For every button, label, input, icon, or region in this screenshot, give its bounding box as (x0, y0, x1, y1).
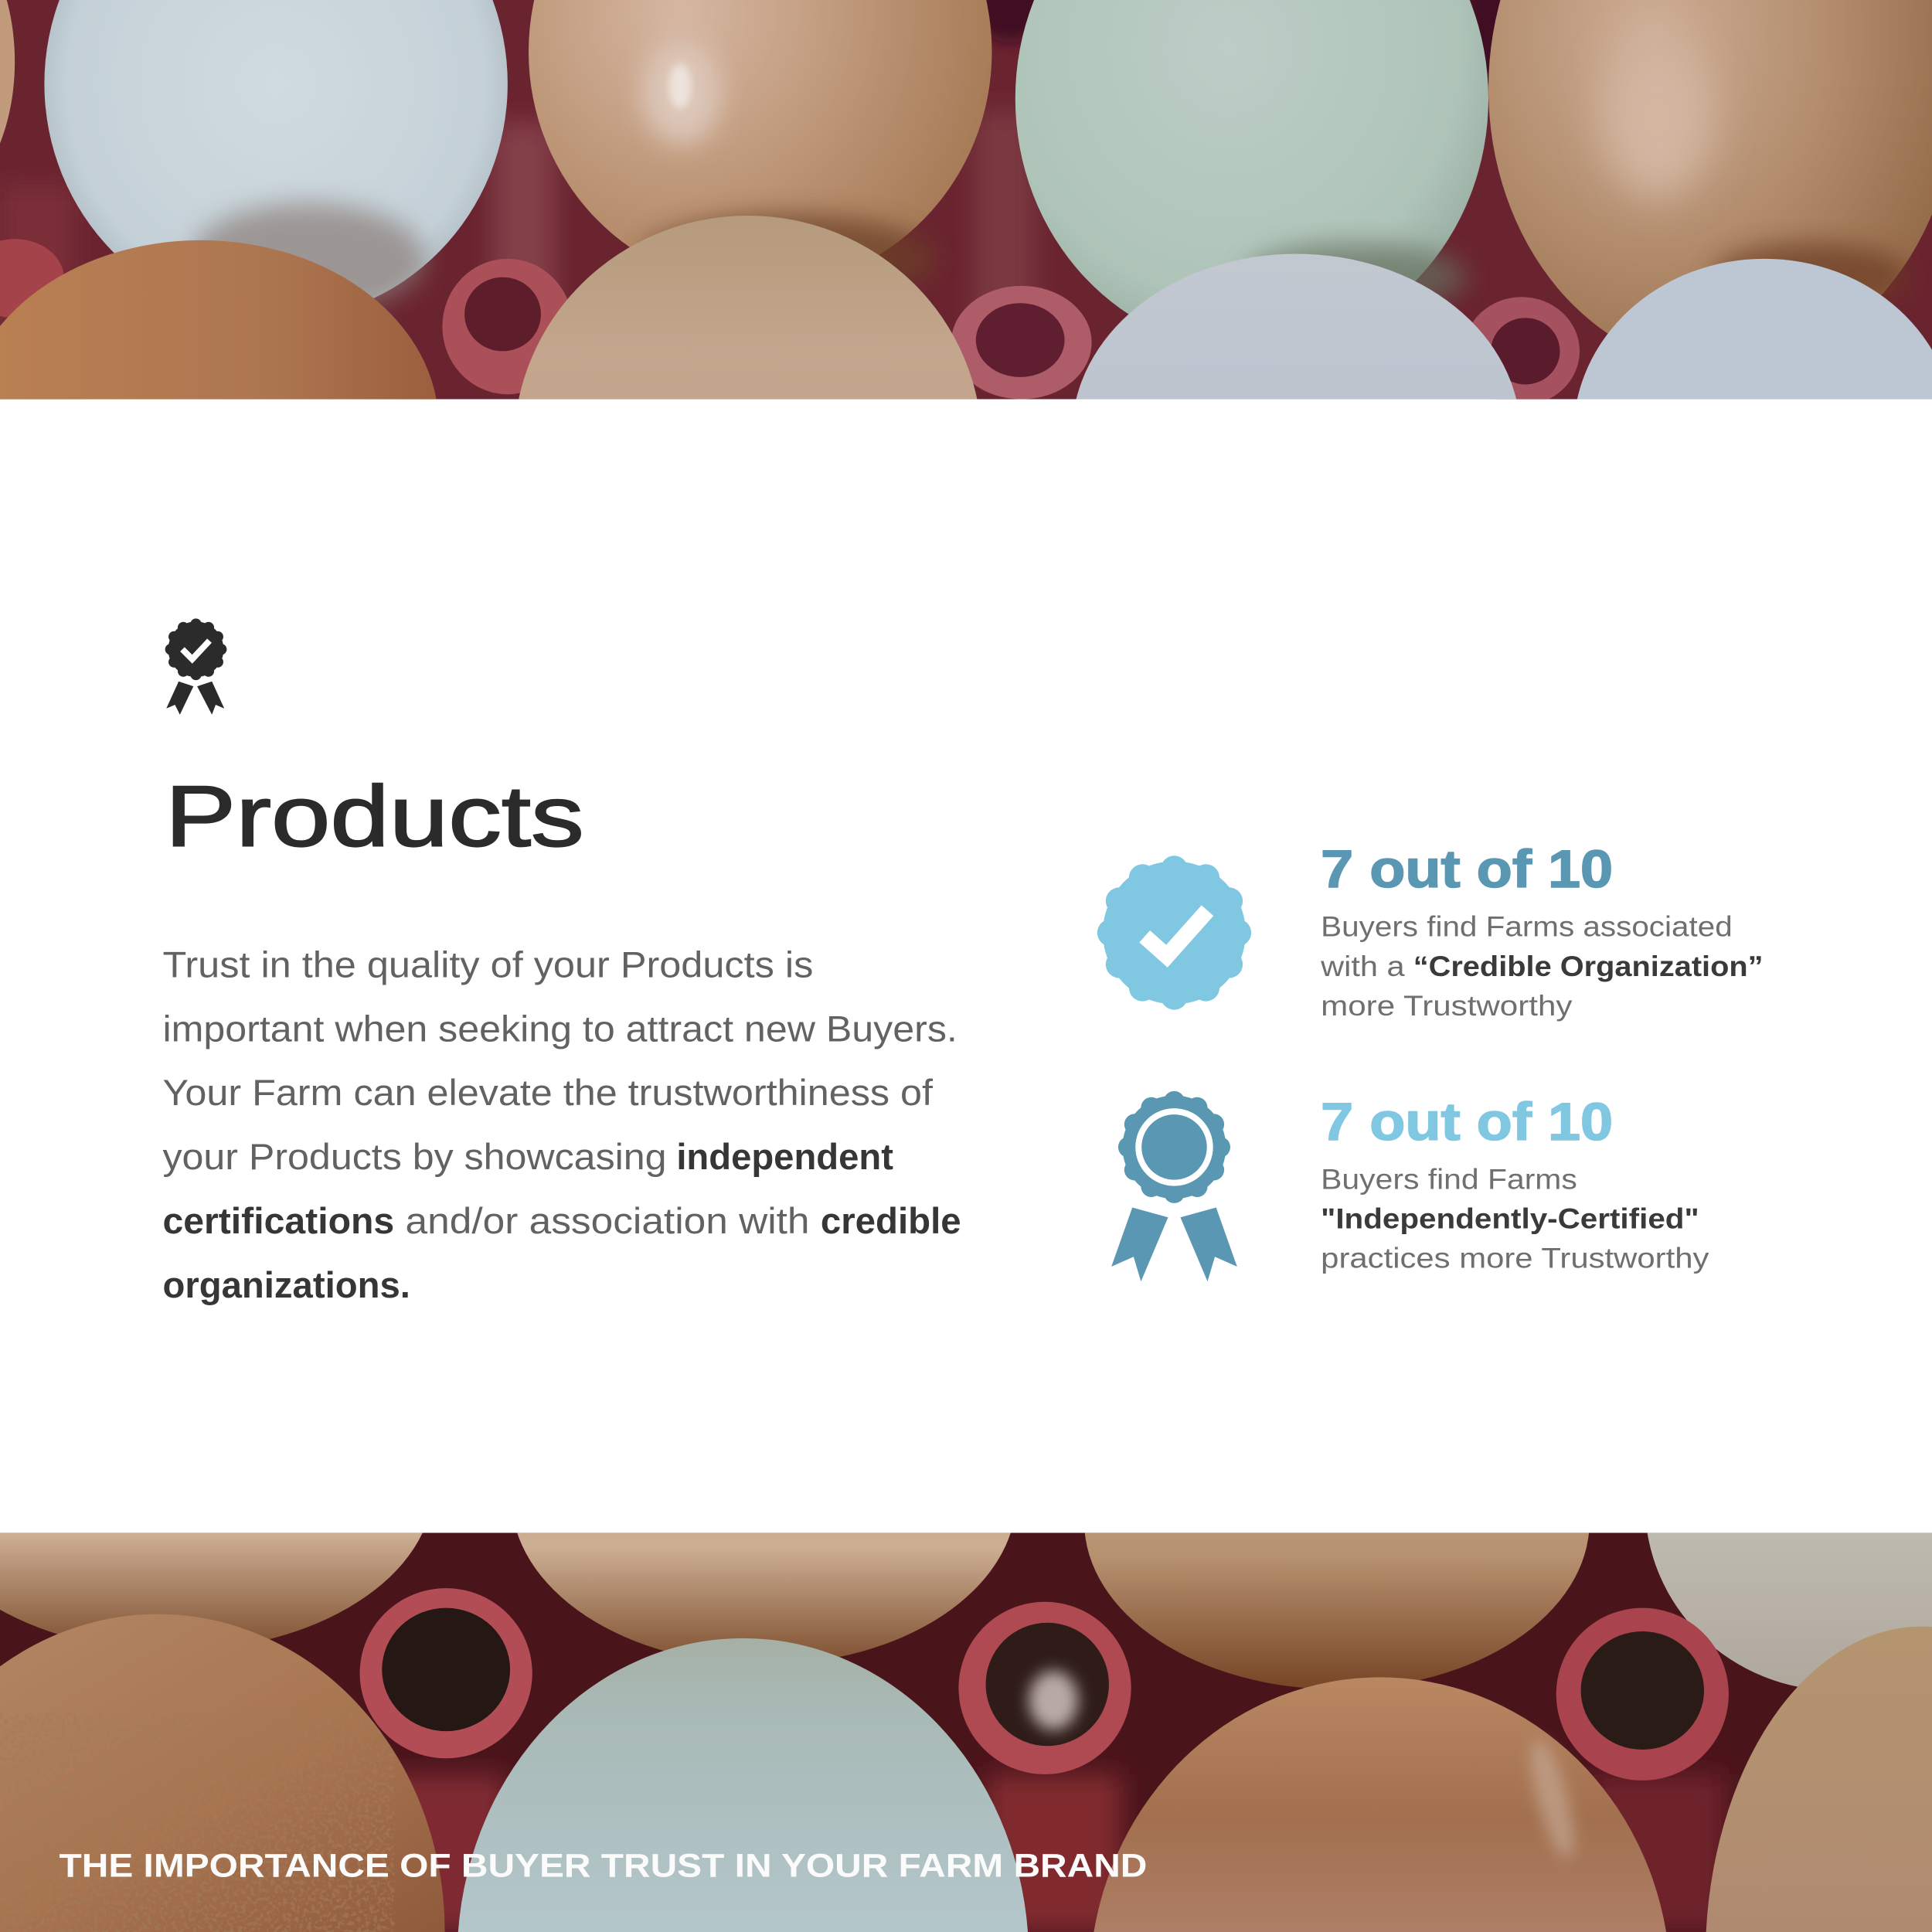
bottom egg photo (0, 1532, 1932, 1932)
body paragraph: credible (821, 1200, 961, 1241)
body paragraph: certifications (162, 1200, 394, 1241)
icon: blue ribbon rosette (1111, 1091, 1237, 1281)
stat 1: with a (1320, 951, 1405, 982)
top egg photo (0, 0, 1932, 400)
body paragraph: Trust in the quality of your Products is (162, 944, 813, 985)
body paragraph: important when seeking to attract new Buyers. (162, 1008, 957, 1049)
stat 1: “Credible Organization” (1413, 951, 1764, 982)
stat 2: "Independently-Certified" (1321, 1203, 1699, 1235)
stat 2: practices more Trustworthy (1321, 1243, 1709, 1274)
stat 1: 7 out of 10 (1321, 839, 1613, 899)
body paragraph: and/or association with (406, 1200, 810, 1241)
stat 1: Buyers find Farms associated (1321, 911, 1733, 943)
body paragraph: your Products by showcasing (162, 1136, 667, 1177)
icon: black rosette badge (165, 618, 226, 715)
footer title: THE IMPORTANCE OF BUYER TRUST IN YOUR FARM BRAND (60, 1847, 1147, 1883)
stat 2 (1321, 1092, 1709, 1274)
stat 1 (1320, 839, 1764, 1022)
body paragraph: organizations. (162, 1264, 410, 1305)
stat 2: Buyers find Farms (1321, 1164, 1577, 1196)
heading: Products: Products (165, 768, 584, 865)
body paragraph: Your Farm can elevate the trustworthiness of (162, 1072, 934, 1113)
body paragraph: independent (676, 1136, 893, 1177)
stat 2: 7 out of 10 (1321, 1092, 1613, 1151)
icon: light blue check badge (1097, 855, 1251, 1010)
stat 1: more Trustworthy (1321, 990, 1573, 1022)
body paragraph (162, 944, 961, 1305)
